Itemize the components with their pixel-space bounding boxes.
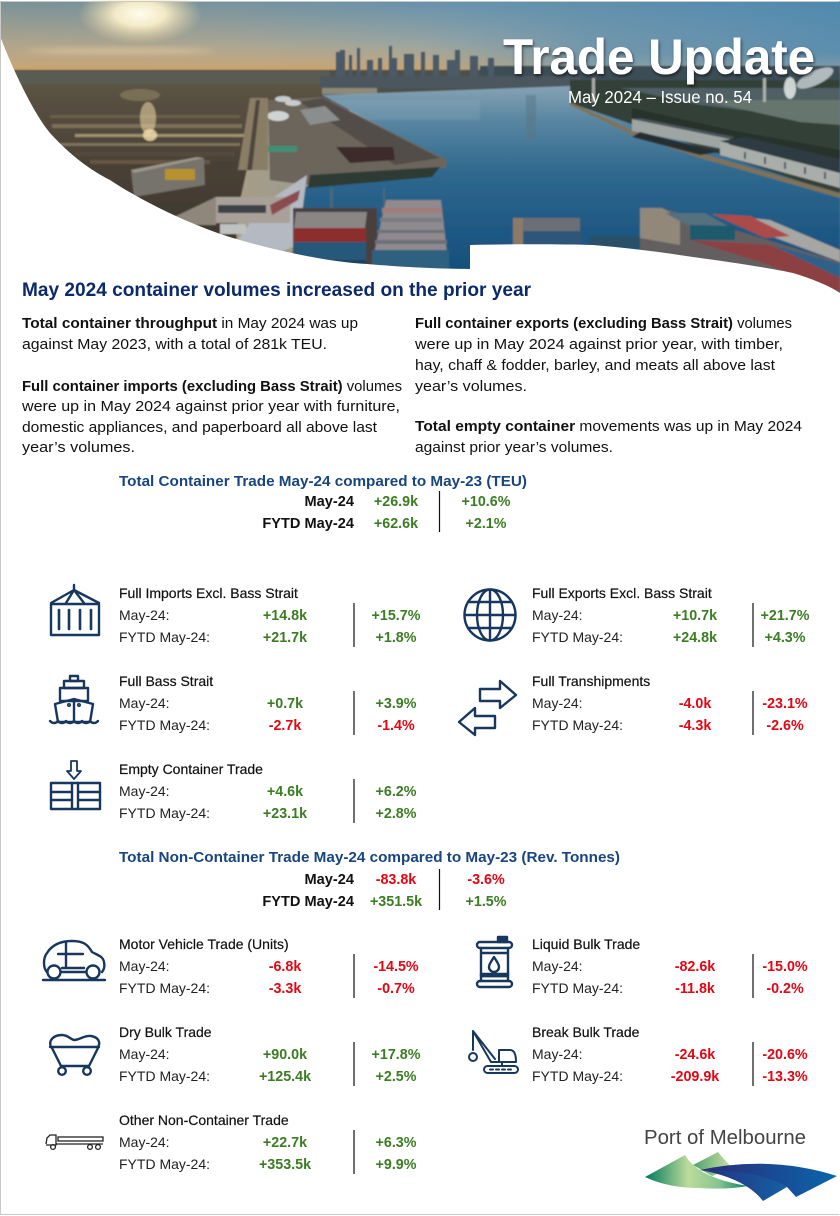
- panel: motor vehicle trade: Motor Vehicle Trade (Units): [119, 936, 289, 952]
- panel: liquid bulk trade: Liquid Bulk Trade: [532, 936, 640, 952]
- summary: total non-container trade: +351.5k: [370, 894, 422, 910]
- icon: transhipment arrows: [459, 681, 516, 735]
- panel: full exports: +4.3%: [765, 630, 806, 646]
- panel: dry bulk trade: +17.8%: [372, 1047, 421, 1063]
- icon: car: [43, 941, 105, 980]
- panel: full transhipments: May-24:: [532, 695, 583, 711]
- panel: break bulk trade: [532, 1024, 808, 1086]
- panel: full exports: +21.7%: [761, 608, 810, 624]
- panel: full imports: +21.7k: [263, 630, 307, 646]
- panel: dry bulk trade: FYTD May-24:: [119, 1068, 210, 1084]
- panel: break bulk trade: May-24:: [532, 1046, 583, 1062]
- panel: full imports: FYTD May-24:: [119, 629, 210, 645]
- panel: full transhipments: -2.6%: [766, 718, 804, 734]
- warehouse block: [131, 158, 205, 197]
- panel: other non-container trade: Other Non-Container Trade: [119, 1112, 289, 1128]
- panel: full imports: +14.8k: [263, 608, 307, 624]
- header white wave cut-outs: [0, 1, 840, 310]
- panel: full bass strait: Full Bass Strait: [119, 673, 213, 689]
- summary: total non-container trade: FYTD May-24: [262, 894, 355, 910]
- summary: total container trade: May-24: [305, 494, 355, 510]
- panel: other non-container trade: +22.7k: [263, 1135, 307, 1151]
- panel: break bulk trade: -209.9k: [671, 1069, 719, 1085]
- text block: right column: against prior year’s volumes.: [415, 440, 613, 456]
- summary: total container trade: +26.9k: [374, 494, 418, 510]
- panel: full transhipments: Full Transhipments: [532, 673, 650, 689]
- panel: break bulk trade: -20.6%: [762, 1047, 808, 1063]
- section heading: non-container trade: Total Non-Container Trade May-24 compared to May-23 (Rev. Tonnes): [119, 850, 620, 866]
- summary: total container trade: +2.1%: [466, 516, 507, 532]
- panel: empty container trade: +23.1k: [263, 806, 307, 822]
- panel: full imports: Full Imports Excl. Bass Strait: [119, 585, 298, 601]
- panel: full bass strait: -1.4%: [377, 718, 415, 734]
- panel: empty container trade: Empty Container Trade: [119, 761, 263, 777]
- panel: full transhipments: -4.3k: [679, 718, 711, 734]
- panel: motor vehicle trade: -3.3k: [269, 981, 301, 997]
- panel: break bulk trade: FYTD May-24:: [532, 1068, 623, 1084]
- summary: total non-container trade: -83.8k: [376, 872, 416, 888]
- panel: full imports: [119, 585, 421, 647]
- panel: other non-container trade: +353.5k: [259, 1157, 311, 1173]
- text block: right column: Full container exports (excluding Bass Strait) volumes: [415, 316, 792, 332]
- panel: dry bulk trade: [119, 1024, 421, 1086]
- panel: full bass strait: +3.9%: [376, 696, 417, 712]
- panel: liquid bulk trade: May-24:: [532, 958, 583, 974]
- panel: motor vehicle trade: -0.7%: [377, 981, 415, 997]
- text block: left column: Total container throughput in May 2024 was up: [22, 316, 358, 332]
- icon: empty container stack: [51, 761, 100, 809]
- panel: other non-container trade: FYTD May-24:: [119, 1156, 210, 1172]
- city skyline: [336, 46, 494, 78]
- quay edge: [570, 102, 840, 198]
- panel: other non-container trade: +6.3%: [376, 1135, 417, 1151]
- icon: dry bulk cart: [50, 1035, 99, 1075]
- section heading: container trade: Total Container Trade May-24 compared to May-23 (TEU): [119, 474, 527, 490]
- issue subtitle: May 2024 – Issue no. 54: [568, 87, 752, 107]
- panel: liquid bulk trade: -15.0%: [762, 959, 808, 975]
- panel: full exports: +24.8k: [673, 630, 717, 646]
- panel: empty container trade: +4.6k: [267, 784, 303, 800]
- icon: container on crane hook: [51, 585, 99, 635]
- panel: dry bulk trade: +90.0k: [263, 1047, 307, 1063]
- panel: full bass strait: [119, 673, 417, 735]
- icon: globe: [464, 590, 516, 640]
- title: Trade Update: [503, 29, 815, 85]
- panel: dry bulk trade: Dry Bulk Trade: [119, 1024, 212, 1040]
- icon: ship: [50, 676, 98, 723]
- panel: motor vehicle trade: -6.8k: [269, 959, 301, 975]
- panel: break bulk trade: -24.6k: [675, 1047, 715, 1063]
- text block: right column: year’s volumes.: [415, 379, 527, 395]
- right bank land: [570, 80, 840, 195]
- panel: full exports: Full Exports Excl. Bass Strait: [532, 585, 712, 601]
- icon: flatbed truck: [46, 1135, 103, 1149]
- summary: total container trade: +62.6k: [374, 516, 418, 532]
- summary: total container trade: [262, 491, 511, 532]
- panel: break bulk trade: -13.3%: [762, 1069, 808, 1085]
- panel: full bass strait: +0.7k: [267, 696, 303, 712]
- panel: full imports: May-24:: [119, 607, 170, 623]
- panel: other non-container trade: +9.9%: [376, 1157, 417, 1173]
- panel: motor vehicle trade: -14.5%: [373, 959, 419, 975]
- text block: left column: against May 2023, with a total of 281k TEU.: [22, 337, 327, 353]
- text block: left column: domestic appliances, and paperboard all above last: [22, 420, 377, 436]
- main heading: May 2024 container volumes increased on the prior year: [22, 279, 531, 301]
- summary: total container trade: +10.6%: [462, 494, 511, 510]
- panel: liquid bulk trade: -11.8k: [675, 981, 715, 997]
- summary: total container trade: FYTD May-24: [262, 516, 355, 532]
- container stacks: [293, 208, 377, 268]
- panel: full transhipments: -23.1%: [762, 696, 808, 712]
- left yard: [0, 71, 330, 300]
- panel: full imports: +1.8%: [376, 630, 417, 646]
- pier: [268, 97, 447, 185]
- summary: total non-container trade: [262, 869, 507, 910]
- distant land: [0, 70, 840, 110]
- summary: total non-container trade: May-24: [305, 872, 355, 888]
- text block: right column: were up in May 2024 against prior year, with timber,: [414, 337, 783, 353]
- panel: liquid bulk trade: FYTD May-24:: [532, 980, 623, 996]
- text block: left column: year’s volumes.: [22, 440, 135, 456]
- panel: liquid bulk trade: [532, 936, 808, 998]
- panel: full exports: [532, 585, 810, 647]
- panel: full imports: +15.7%: [372, 608, 421, 624]
- logo: Port of Melbourne: Port of Melbourne: [644, 1127, 806, 1149]
- panel: full transhipments: FYTD May-24:: [532, 717, 623, 733]
- panel: empty container trade: May-24:: [119, 783, 170, 799]
- water: [300, 86, 840, 300]
- panel: liquid bulk trade: -0.2%: [766, 981, 804, 997]
- panel: empty container trade: +6.2%: [376, 784, 417, 800]
- rail corridor: [238, 98, 268, 170]
- panel: full transhipments: -4.0k: [679, 696, 711, 712]
- text block: left column: [21, 316, 402, 456]
- text block: right column: Total empty container movements was up in May 2024: [415, 419, 802, 435]
- icon: crawler crane: [469, 1031, 518, 1073]
- text block: right column: [414, 316, 802, 456]
- text block: left column: Full container imports (excluding Bass Strait) volumes: [22, 379, 402, 395]
- panel: motor vehicle trade: [119, 936, 419, 998]
- warehouses: [632, 119, 730, 150]
- panel: motor vehicle trade: FYTD May-24:: [119, 980, 210, 996]
- logo: Port of Melbourne: [644, 1127, 837, 1201]
- panel: full bass strait: -2.7k: [269, 718, 301, 734]
- panel: dry bulk trade: May-24:: [119, 1046, 170, 1062]
- text block: left column: were up in May 2024 against prior year with furniture,: [21, 399, 400, 415]
- panel: full exports: +10.7k: [673, 608, 717, 624]
- summary: total non-container trade: +1.5%: [466, 894, 507, 910]
- panel: dry bulk trade: +125.4k: [259, 1069, 311, 1085]
- panel: liquid bulk trade: -82.6k: [675, 959, 715, 975]
- panel: full bass strait: May-24:: [119, 695, 170, 711]
- panel: motor vehicle trade: May-24:: [119, 958, 170, 974]
- header photo: port of Melbourne: [0, 0, 840, 301]
- panel: full transhipments: [532, 673, 808, 735]
- panel: full exports: May-24:: [532, 607, 583, 623]
- ship: [238, 175, 307, 252]
- summary: total non-container trade: -3.6%: [467, 872, 505, 888]
- panel: empty container trade: FYTD May-24:: [119, 805, 210, 821]
- yard glints: [50, 115, 240, 118]
- panel: empty container trade: [119, 761, 417, 823]
- steam: [794, 63, 836, 93]
- panel: full exports: FYTD May-24:: [532, 629, 623, 645]
- icon: liquid bulk barrel: [477, 937, 512, 987]
- text block: right column: hay, chaff & fodder, barley, and meats all above last: [415, 358, 775, 374]
- panel: other non-container trade: May-24:: [119, 1134, 170, 1150]
- panel: dry bulk trade: +2.5%: [376, 1069, 417, 1085]
- panel: break bulk trade: Break Bulk Trade: [532, 1024, 640, 1040]
- panel: other non-container trade: [119, 1112, 417, 1174]
- panel: full bass strait: FYTD May-24:: [119, 717, 210, 733]
- panel: empty container trade: +2.8%: [376, 806, 417, 822]
